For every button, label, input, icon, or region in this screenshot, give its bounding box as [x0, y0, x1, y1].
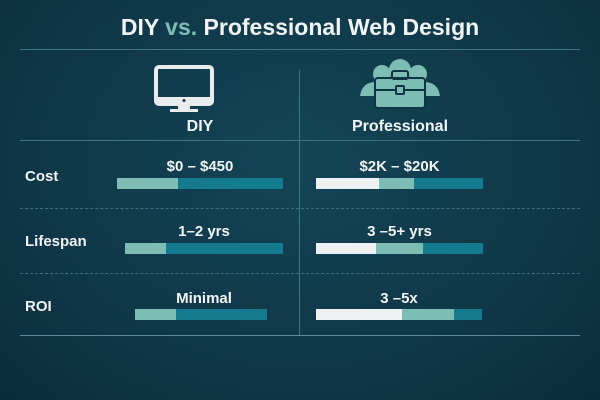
title: DIY vs. Professional Web Design	[121, 14, 479, 40]
DIY lifespan: 1–2 yrs	[178, 223, 230, 240]
Pro ROI: 3 –5x	[380, 290, 418, 307]
icon: monitor	[154, 65, 214, 112]
DIY ROI	[135, 290, 267, 320]
DIY ROI: Minimal	[176, 290, 232, 307]
Pro ROI	[316, 290, 482, 320]
DIY cost	[117, 158, 283, 189]
row label: Cost: Cost	[25, 168, 58, 185]
Pro cost: $2K – $20K	[359, 158, 440, 175]
row label: Lifespan: Lifespan	[25, 233, 87, 250]
row label: ROI: ROI	[25, 298, 52, 315]
header: DIY: DIY	[187, 118, 213, 135]
Pro cost	[316, 158, 483, 189]
Pro lifespan: 3 –5+ yrs	[367, 223, 432, 240]
DIY cost: $0 – $450	[167, 158, 233, 175]
header: Professional: Professional	[352, 118, 448, 135]
Pro lifespan	[316, 223, 483, 254]
DIY lifespan	[125, 223, 283, 254]
icon: briefcase with people	[360, 59, 440, 109]
